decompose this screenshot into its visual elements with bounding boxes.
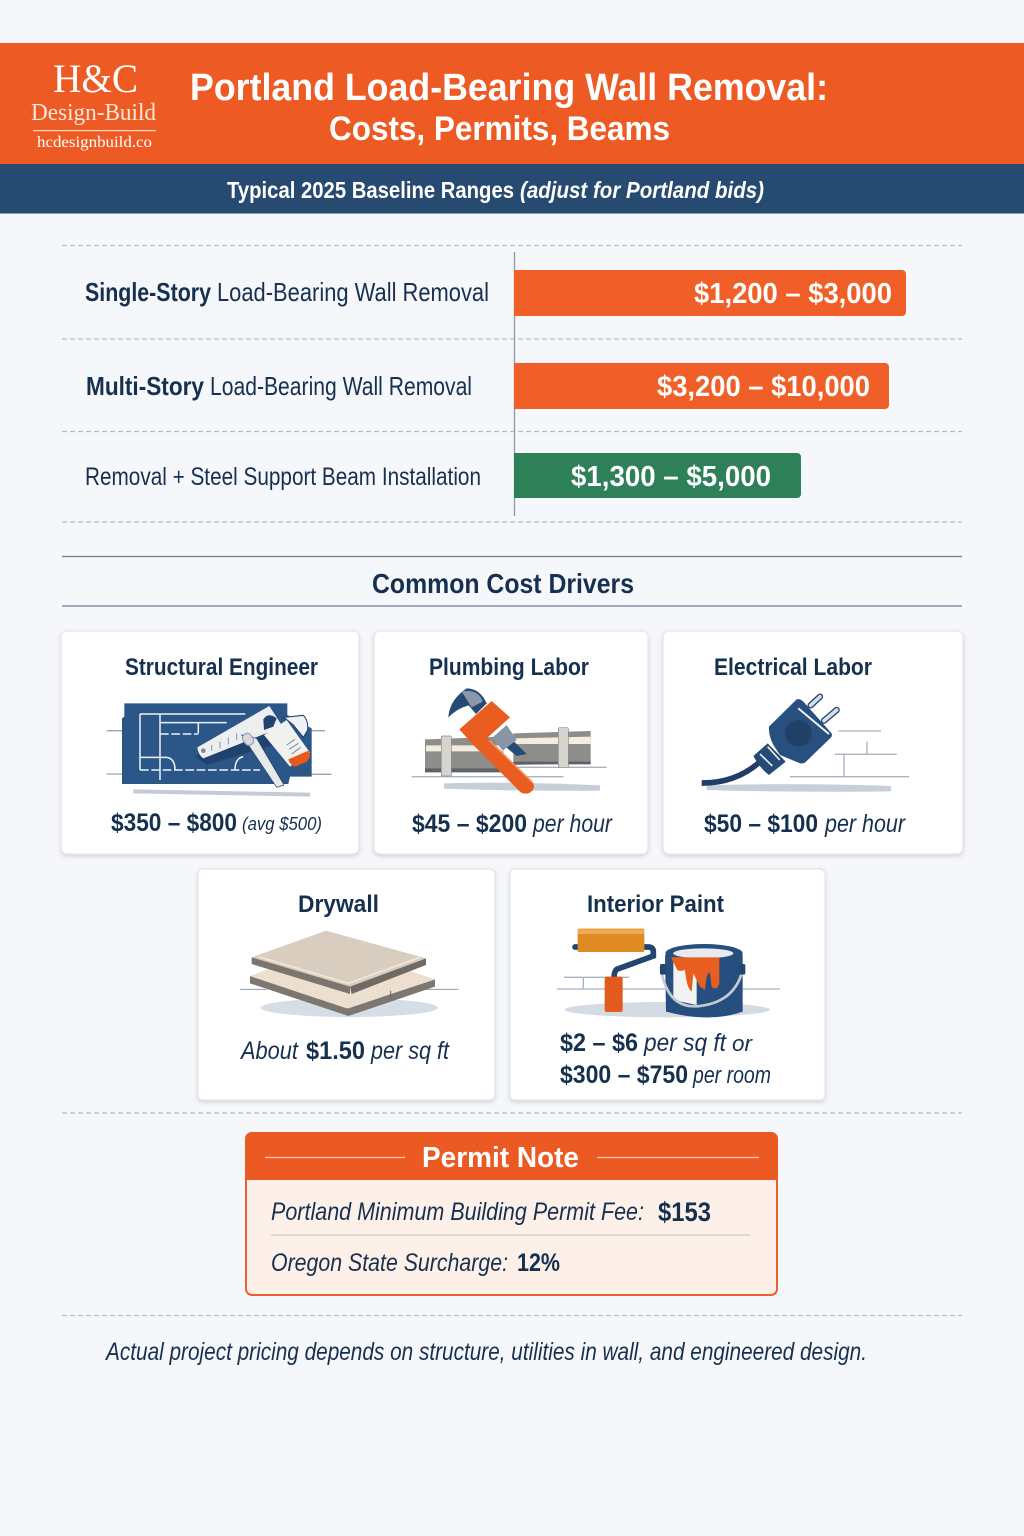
row: multi-story: Multi-Story [86, 371, 204, 401]
panel: electrical labor: Electrical Labor [714, 654, 872, 681]
panel: drywall [198, 869, 495, 1100]
panel: plumbing labor: Plumbing Labor [429, 654, 589, 681]
logo: H&C [53, 56, 138, 101]
cost: electrical labor [704, 810, 906, 838]
row: single-story: $1,200 – $3,000 [694, 278, 892, 310]
cost: structural engineer [111, 809, 322, 837]
row: single-story: Load-Bearing Wall Removal [217, 277, 489, 307]
subtitle band: (adjust for Portland bids) [520, 177, 764, 203]
icon: paint roller and can [557, 929, 780, 1017]
logo: hcdesignbuild.co [37, 134, 152, 151]
row: single-story: Single-Story [85, 277, 211, 307]
icon: blueprint and caliper [107, 703, 332, 797]
heading: common cost drivers: Common Cost Drivers [372, 568, 634, 599]
permit fee: Portland Minimum Building Permit Fee: [271, 1198, 644, 1226]
row: steel beam [85, 453, 801, 498]
cost: interior paint: or [732, 1031, 754, 1056]
row: steel beam: $1,300 – $5,000 [571, 461, 771, 493]
cost: structural engineer: (avg $500) [242, 814, 322, 834]
cost: interior paint: per sq ft [643, 1029, 727, 1057]
row: multi-story: Load-Bearing Wall Removal [210, 371, 472, 401]
header band [0, 43, 1024, 164]
panel: drywall: Drywall [298, 891, 379, 918]
row: multi-story [86, 363, 889, 409]
panel: plumbing labor [374, 631, 648, 854]
panel: interior paint: Interior Paint [587, 891, 724, 918]
cost: interior paint: $2 – $6 [560, 1029, 638, 1057]
title: Costs, Permits, Beams [329, 110, 670, 148]
cost: plumbing labor: $45 – $200 [412, 810, 527, 838]
row: steel beam: Removal + Steel Support Beam Installation [85, 463, 481, 491]
permit fee: $153 [658, 1197, 711, 1227]
row: multi-story: $3,200 – $10,000 [657, 371, 870, 403]
cost: interior paint [560, 1029, 771, 1089]
logo [31, 56, 156, 151]
logo: Design-Build [31, 100, 156, 126]
panel: structural engineer [61, 631, 359, 854]
cost: drywall: per sq ft [370, 1037, 450, 1065]
cost: interior paint: per room [692, 1062, 771, 1089]
permit header: Permit Note [422, 1142, 579, 1174]
cost: plumbing labor [412, 810, 613, 838]
icon: pipe wrench [412, 688, 607, 794]
cost: electrical labor: $50 – $100 [704, 810, 818, 838]
permit header [245, 1132, 778, 1180]
state surcharge: Oregon State Surcharge: [271, 1249, 508, 1277]
cost: interior paint: $300 – $750 [560, 1061, 688, 1089]
cost: drywall: $1.50 [306, 1037, 365, 1065]
title [190, 67, 828, 148]
panel: interior paint [510, 869, 825, 1100]
footer note: Actual project pricing depends on structure, utilities in wall, and engineered design. [104, 1338, 867, 1366]
cost: structural engineer: $350 – $800 [111, 809, 237, 837]
icon: electrical plug [702, 697, 909, 792]
row: single-story [85, 270, 906, 316]
bar chart: baseline ranges [85, 270, 906, 498]
cost: drywall: About [239, 1037, 299, 1065]
state surcharge: 12% [517, 1249, 560, 1277]
title: Portland Load-Bearing Wall Removal: [190, 67, 828, 109]
panel: permit note [245, 1132, 778, 1295]
cost: plumbing labor: per hour [532, 810, 613, 838]
icon: drywall sheets [240, 931, 458, 1017]
subtitle band [0, 164, 1024, 214]
cost: electrical labor: per hour [824, 810, 906, 838]
panel: electrical labor [663, 631, 963, 854]
subtitle band: Typical 2025 Baseline Ranges [227, 177, 514, 203]
cost: drywall [239, 1037, 450, 1065]
panel: structural engineer: Structural Engineer [125, 654, 318, 681]
